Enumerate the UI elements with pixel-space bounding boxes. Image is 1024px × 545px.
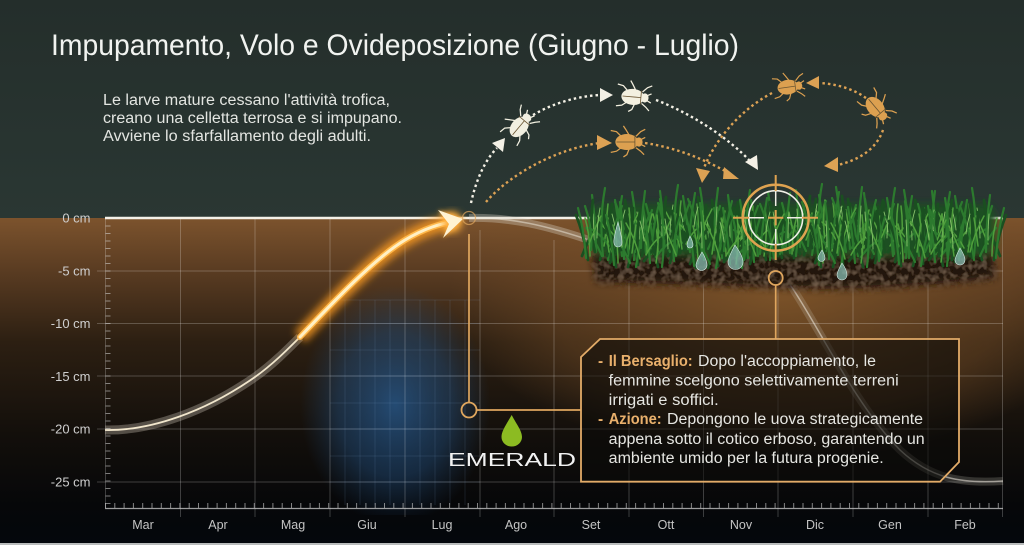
y axis labels: -25 cm xyxy=(51,474,90,490)
x axis month labels: Dic xyxy=(806,518,824,532)
x axis month labels: Mar xyxy=(132,518,154,532)
callout: action text: appena sotto il cotico erboso, garantendo un xyxy=(609,431,925,448)
connector: surface marker to callout xyxy=(462,212,581,418)
background: soil xyxy=(0,218,1024,545)
intro text: Le larve mature cessano l'attività trofica, xyxy=(103,92,390,109)
water drops xyxy=(614,222,965,280)
intro text: Avviene lo sfarfallamento degli adulti. xyxy=(103,128,371,145)
y axis labels: -10 cm xyxy=(51,316,90,331)
callout: action text: Depongono le uova strategicamente xyxy=(667,411,923,428)
beetle: white 1 xyxy=(497,102,543,149)
x axis month labels: Lug xyxy=(432,518,452,532)
y axis labels: -5 cm xyxy=(58,264,90,278)
chart grid and axes xyxy=(97,218,1003,517)
y axis labels: -15 cm xyxy=(51,369,90,384)
intro text xyxy=(103,92,402,145)
callout: target text: irrigati e soffici. xyxy=(609,392,719,409)
callout: action text: Azione: xyxy=(609,411,662,428)
x axis month labels: Ott xyxy=(658,518,675,532)
callout: action text: - xyxy=(598,411,603,428)
gold flight paths xyxy=(486,83,883,202)
logo: Emerald: EMERALD xyxy=(448,450,576,470)
callout: target text: - xyxy=(598,353,603,370)
x axis month labels: Nov xyxy=(730,518,753,532)
x axis month labels: Apr xyxy=(208,518,228,532)
x axis month labels: Giu xyxy=(357,518,377,532)
background: sky xyxy=(0,0,1024,218)
soil strip xyxy=(592,250,996,289)
callout: target text: Il Bersaglio: xyxy=(609,353,693,370)
callout panel xyxy=(581,339,959,482)
y axis labels xyxy=(51,210,90,490)
x axis month labels: Set xyxy=(582,518,601,532)
y axis labels: -20 cm xyxy=(51,422,90,436)
beetle: gold 1 xyxy=(611,126,645,157)
title: Impupamento, Volo e Ovideposizione (Giugno - Luglio) xyxy=(51,29,739,62)
callout: target text: Dopo l'accoppiamento, le xyxy=(698,353,876,370)
depth curve: past and future segments xyxy=(105,218,1003,482)
callout: target text xyxy=(598,353,899,409)
glowing curve with arrow xyxy=(300,210,463,337)
grass base xyxy=(590,204,996,256)
intro text: creano una celletta terrosa e si impupano. xyxy=(103,110,402,127)
x axis month labels: Feb xyxy=(954,518,976,532)
beetle: gold 3 xyxy=(853,84,899,131)
callout: action text: ambiente umido per la futura progenie. xyxy=(609,450,884,467)
white arrowheads xyxy=(492,88,758,170)
x axis month labels: Ago xyxy=(505,518,527,532)
white flight paths xyxy=(471,95,749,203)
logo: Emerald xyxy=(448,415,576,470)
gold arrowheads xyxy=(597,76,838,183)
y axis labels: 0 cm xyxy=(62,210,90,226)
target reticle xyxy=(733,175,818,260)
turf with soil and water drops xyxy=(576,184,1006,289)
callout: action text xyxy=(598,411,925,467)
callout: target text: femmine scelgono selettivamente terreni xyxy=(609,372,899,390)
connector: target to callout xyxy=(769,271,783,339)
x axis month labels: Gen xyxy=(878,518,902,532)
grass blades xyxy=(576,184,1006,268)
beetle: gold 2 xyxy=(771,70,806,103)
beetle: white 2 xyxy=(616,79,653,113)
x axis month labels xyxy=(132,518,976,532)
x axis month labels: Mag xyxy=(281,518,305,532)
